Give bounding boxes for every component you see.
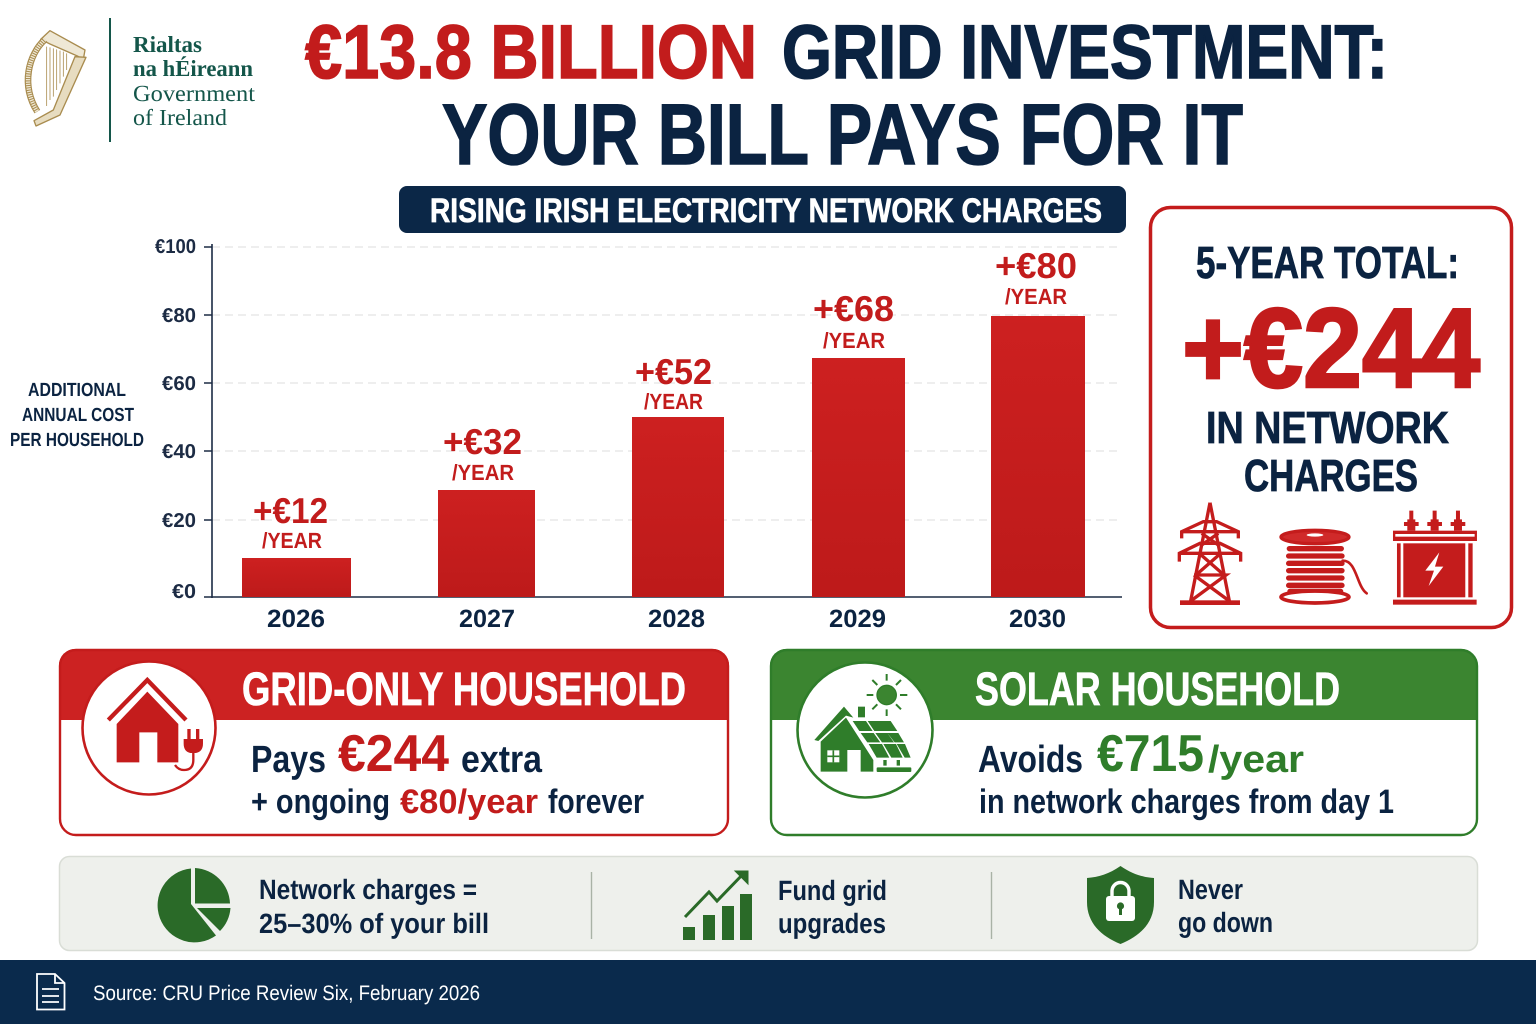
panel: 5-year total: 5-YEAR TOTAL: [1196, 237, 1459, 288]
text: never go down [1178, 874, 1273, 938]
text: pays extra [251, 725, 644, 821]
bar 2027 [438, 421, 535, 633]
y axis title: ANNUAL COST [22, 405, 134, 426]
panel: solar household [770, 649, 1477, 835]
text: pays extra: €80/year [400, 783, 538, 821]
panel: solar household: SOLAR HOUSEHOLD [975, 662, 1340, 715]
text: network charges [259, 874, 489, 939]
text: network charges: Network charges = [259, 874, 477, 905]
bar 2030 [991, 245, 1085, 633]
text: avoids per year [978, 725, 1394, 821]
icon: cable spool [1281, 530, 1367, 603]
icon: house with plug [82, 662, 216, 794]
text: pays extra: Pays [251, 739, 326, 781]
text: avoids per year: €715 [1097, 725, 1204, 783]
bar 2030: 2030 [1009, 605, 1066, 633]
y axis labels [155, 236, 196, 603]
y axis title: ADDITIONAL [28, 380, 126, 401]
icon: transformer [1393, 511, 1477, 605]
icon: shield padlock [1087, 866, 1154, 944]
y axis labels: €20 [162, 510, 196, 532]
panel: 5-year total [1150, 208, 1512, 628]
bar 2027: 2027 [459, 605, 515, 633]
text: network charges: 25–30% of your bill [259, 908, 489, 939]
bar 2029: 2029 [829, 605, 886, 633]
bar 2030: /YEAR [1005, 284, 1067, 309]
footer bar [0, 960, 1536, 1024]
text: never go down: Never [1178, 874, 1243, 905]
y axis labels: €0 [172, 581, 196, 603]
logo: Government of Ireland: Government [133, 81, 256, 106]
bar 2027: /YEAR [452, 460, 514, 485]
text: avoids per year: /year [1208, 739, 1304, 781]
icon: harp [28, 31, 86, 126]
bar chart [155, 236, 1122, 633]
text: never go down: go down [1178, 907, 1273, 938]
title [305, 10, 1388, 183]
y axis title: PER HOUSEHOLD [10, 430, 144, 451]
logo: Government of Ireland: of Ireland [133, 105, 228, 130]
bar 2028 [632, 351, 724, 633]
bar 2029: +€68 [813, 288, 894, 329]
bar 2026: 2026 [267, 605, 325, 633]
logo: Government of Ireland: Rialtas [133, 32, 202, 57]
panel: facts strip [60, 856, 1478, 950]
icon: solar house [798, 662, 932, 798]
icon: document [37, 974, 64, 1010]
text: pays extra: + ongoing [251, 783, 390, 821]
bar 2026: /YEAR [262, 528, 322, 553]
icon: pylon [1179, 503, 1241, 605]
icon: pie chart [158, 868, 230, 942]
bar 2029 [812, 288, 905, 633]
bar 2027: +€32 [443, 421, 522, 462]
text: avoids per year: in network charges from day 1 [979, 783, 1394, 821]
subtitle banner: RISING IRISH ELECTRICITY NETWORK CHARGES [430, 192, 1102, 230]
y axis labels: €60 [162, 373, 196, 395]
title: GRID INVESTMENT: [782, 10, 1388, 95]
y axis labels: €80 [162, 305, 196, 327]
panel: grid-only household: GRID-ONLY HOUSEHOLD [242, 662, 686, 715]
y axis labels: €100 [155, 236, 196, 258]
bar 2029: /YEAR [823, 328, 885, 353]
bar 2026: +€12 [253, 490, 328, 531]
bar 2028: /YEAR [644, 389, 703, 414]
icon: rising bars [683, 871, 752, 940]
text: pays extra: forever [548, 783, 644, 821]
y axis labels: €40 [162, 441, 196, 463]
panel: grid-only household [59, 649, 729, 835]
panel: 5-year total: +€244 [1182, 285, 1480, 411]
text: avoids per year: Avoids [978, 739, 1083, 781]
bar 2026 [242, 490, 351, 633]
bar 2028: 2028 [648, 605, 705, 633]
logo: Government of Ireland [28, 18, 256, 142]
bar 2028: +€52 [635, 351, 712, 392]
logo: Government of Ireland: na hÉireann [133, 56, 253, 81]
subtitle banner [399, 186, 1126, 233]
panel: 5-year total: IN NETWORK [1206, 402, 1449, 453]
text: fund grid: Fund grid [778, 875, 887, 906]
panel: 5-year total: CHARGES [1244, 450, 1418, 501]
text: fund grid: upgrades [778, 908, 886, 939]
bar 2030: +€80 [995, 245, 1077, 286]
text: pays extra: €244 [338, 725, 449, 783]
y axis title [10, 380, 144, 451]
title: €13.8 BILLION [305, 10, 757, 95]
title: YOUR BILL PAYS FOR IT [442, 87, 1243, 183]
text: pays extra: extra [461, 739, 543, 781]
text: fund grid [778, 875, 887, 939]
footer bar: Source: CRU Price Review Six, February 2026 [93, 982, 480, 1005]
